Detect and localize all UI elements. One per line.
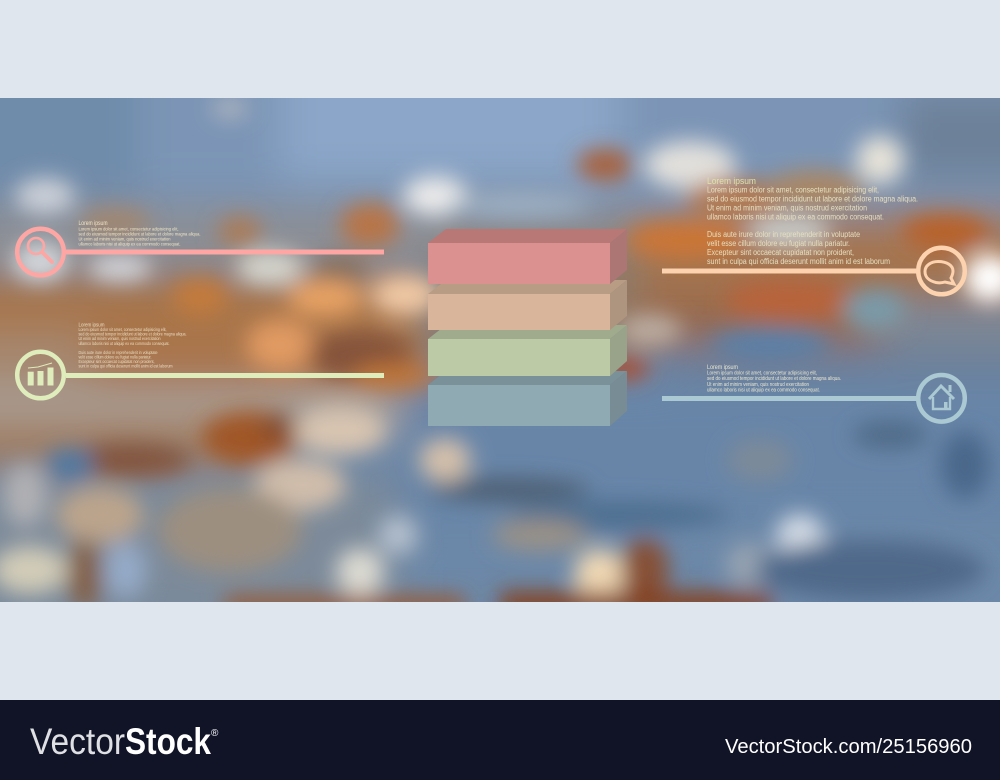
text block: velit esse cillum dolore eu fugiat nulla pariatur. (78, 354, 152, 359)
footer image id: VectorStock.com/25156960 (725, 736, 972, 758)
icon: bar chart in ring (17, 352, 64, 398)
text block (78, 322, 186, 369)
footer logo (30, 721, 219, 762)
text block: velit esse cillum dolore eu fugiat nulla pariatur. (707, 239, 850, 248)
text block: sunt in culpa qui officia deserunt mollit anim id est laborum (707, 257, 890, 266)
text block: Lorem ipsum dolor sit amet, consectetur adipisicing elit, (707, 186, 879, 194)
stacked 3D block (428, 229, 627, 426)
text block: sed do eiusmod tempor incididunt ut labore et dolore magna aliqua. (707, 194, 918, 204)
text block: Ut enim ad minim veniam, quis nostrud exercitation (707, 382, 809, 388)
icon: speech bubble in ring (918, 248, 965, 294)
text block: Lorem ipsum (707, 364, 738, 371)
text block: Lorem ipsum (78, 221, 108, 227)
connector line (66, 250, 384, 254)
text block: sunt in culpa qui officia deserunt mollit anim id est laborum (78, 364, 173, 369)
text block: Lorem ipsum dolor sit amet, consectetur adipisicing elit, (707, 371, 817, 377)
text block: Ut enim ad minim veniam, quis nostrud exercitation (78, 336, 161, 341)
block 2: peach (428, 280, 627, 330)
text block: Lorem ipsum dolor sit amet, consectetur adipisicing elit, (78, 226, 178, 232)
block 1: red (428, 229, 627, 284)
text block: Lorem ipsum (707, 175, 756, 186)
icon: house in ring (918, 375, 965, 422)
text block: ullamco laboris nisi ut aliquip ex ea commodo consequat. (78, 341, 170, 346)
text block: Ut enim ad minim veniam, quis nostrud exercitation (707, 204, 867, 212)
text block: sed do eiusmod tempor incididunt ut labore et dolore magna aliqua. (78, 232, 200, 238)
text block (707, 364, 841, 394)
footer logo: Stock (125, 721, 211, 762)
footer logo: ® (211, 728, 219, 739)
callout 2: chart, lower left (17, 322, 384, 398)
text block: sed do eiusmod tempor incididunt ut labore et dolore magna aliqua. (707, 376, 841, 382)
bottom band (0, 602, 1000, 700)
text block: Duis aute irure dolor in reprehenderit in voluptate (707, 230, 860, 239)
connector line (66, 373, 384, 378)
text block: Excepteur sint occaecat cupidatat non proident, (707, 248, 854, 257)
text block: ullamco laboris nisi ut aliquip ex ea commodo consequat. (707, 388, 820, 394)
connector line (662, 268, 917, 274)
connector line (662, 396, 917, 401)
text block (707, 175, 918, 266)
block 3: green (428, 325, 627, 376)
text block: Lorem ipsum (78, 322, 105, 328)
footer bar (0, 700, 1000, 780)
text block: Ut enim ad minim veniam, quis nostrud exercitation (78, 236, 171, 242)
text block: sed do eiusmod tempor incididunt ut labore et dolore magna aliqua. (78, 332, 186, 336)
icon: magnifier in ring (17, 229, 64, 275)
blurred photo background (0, 98, 1000, 602)
text block: ullamco laboris nisi ut aliquip ex ea commodo consequat. (78, 242, 180, 248)
top band (0, 0, 1000, 98)
callout 4: home, lower right (662, 364, 965, 422)
text block: Lorem ipsum dolor sit amet, consectetur adipisicing elit, (78, 327, 166, 332)
callout 3: speech, top right (662, 175, 965, 294)
callout 1: search, top left (17, 221, 384, 275)
block 4: blue-grey (428, 371, 627, 426)
text block: ullamco laboris nisi ut aliquip ex ea commodo consequat. (707, 212, 884, 222)
text block (78, 221, 200, 248)
text block: Duis aute irure dolor in reprehenderit in voluptate (78, 350, 158, 355)
text block: Excepteur sint occaecat cupidatat non proident, (78, 359, 154, 364)
footer logo: Vector (30, 721, 125, 762)
